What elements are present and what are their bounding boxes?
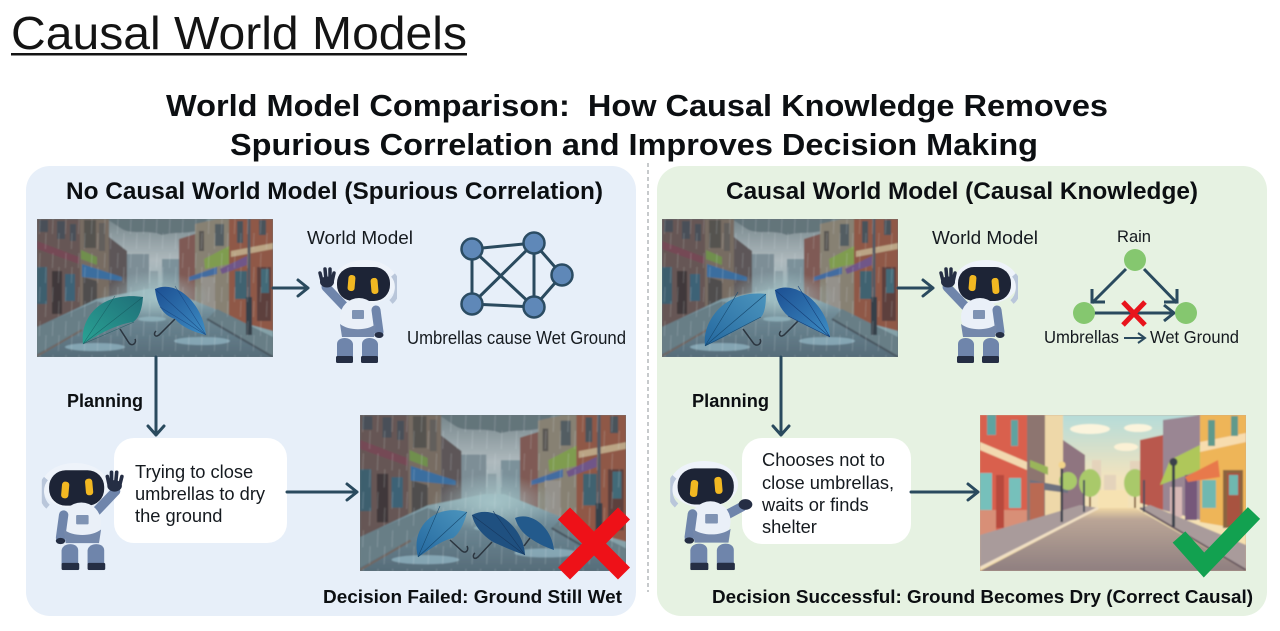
label: world model: World Model [307, 227, 413, 248]
icon: robot beside bubble [670, 461, 752, 570]
speech bubble: chooses not to close: waits or finds [761, 494, 869, 515]
image: failed outcome, rainy street [360, 415, 626, 571]
label: planning: Planning [692, 391, 769, 411]
speech bubble: trying to close umbrellas: Trying to close [135, 461, 253, 482]
speech bubble: trying to close umbrellas: the ground [135, 505, 222, 526]
main heading [166, 88, 1108, 162]
arrow: planning down [773, 357, 789, 435]
speech bubble: trying to close umbrellas: umbrellas to dry [135, 483, 266, 504]
image: rainy street with blue umbrellas [662, 219, 898, 357]
speech bubble: chooses not to close: close umbrellas, [762, 472, 894, 493]
icon: robot beside bubble [41, 463, 122, 570]
label: rain: Rain [1117, 228, 1151, 246]
icon: robot waving [941, 260, 1018, 363]
speech bubble: chooses not to close [742, 438, 911, 544]
icon: robot waving [320, 260, 397, 363]
panel heading: no causal: No Causal World Model (Spurious Correlation) [66, 178, 603, 205]
speech bubble: chooses not to close: Chooses not to [762, 449, 885, 470]
caption: decision failed: Decision Failed: Ground Still Wet [323, 586, 622, 607]
icon: red x [564, 514, 624, 574]
icon: green check [1179, 513, 1254, 565]
label: umbrellas to wet ground: Wet Ground [1150, 327, 1239, 347]
label: umbrellas cause wet ground: Umbrellas cause Wet Ground [407, 328, 626, 348]
label: umbrellas to wet ground: Umbrellas [1044, 327, 1119, 347]
main heading: Spurious Correlation and Improves Decision Making [230, 127, 1038, 162]
causal graph: rain, umbrellas, wet ground [1044, 228, 1239, 347]
arrow: action to outcome [911, 484, 978, 500]
title: Causal World Models [11, 7, 467, 59]
arrow: image to world model [898, 280, 933, 296]
speech bubble: trying to close umbrellas [114, 438, 287, 543]
panel heading: causal: Causal World Model (Causal Knowledge) [726, 178, 1198, 205]
arrow: planning down [148, 357, 164, 435]
panel: no causal world model [26, 166, 636, 616]
arrow: image to world model [273, 280, 308, 296]
image: successful outcome, sunny street [980, 415, 1246, 571]
speech bubble: chooses not to close: shelter [762, 516, 817, 537]
caption: decision successful: Decision Successful: Ground Becomes Dry (Correct Causal) [712, 586, 1253, 607]
main heading: World Model Comparison: How Causal Knowledge Removes [166, 88, 1108, 123]
label: world model: World Model [932, 227, 1038, 248]
label: planning: Planning [67, 391, 143, 411]
panel: causal world model [657, 166, 1267, 616]
graph: spurious network [462, 232, 572, 318]
arrow: action to outcome [287, 484, 357, 500]
label: umbrellas to wet ground [1044, 327, 1239, 347]
image: rainy street with two umbrellas [37, 219, 273, 357]
